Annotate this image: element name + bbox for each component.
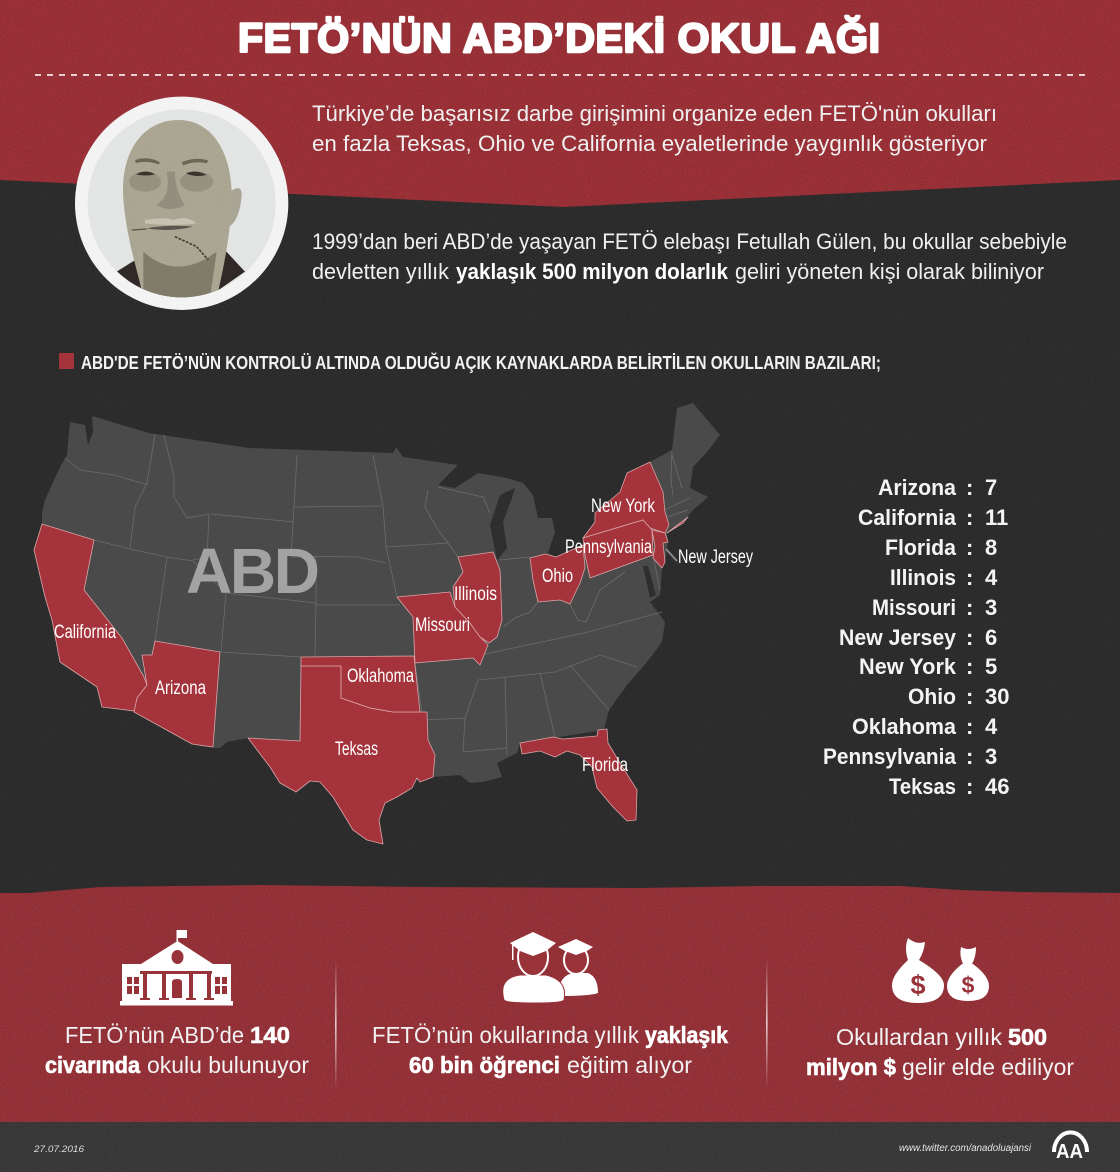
lake michigan <box>490 488 515 560</box>
pennsylvania <box>583 520 653 578</box>
state labels: New York <box>591 496 655 517</box>
stat: revenue: milyon $ <box>806 1054 896 1080</box>
state labels: Ohio <box>542 566 573 587</box>
school counts list: 3 <box>985 744 997 769</box>
stat: students: 60 bin öğrenci <box>409 1052 560 1078</box>
school counts list: 6 <box>985 625 997 650</box>
state borders <box>65 435 690 755</box>
title divider <box>35 74 1085 76</box>
school counts list: Illinois <box>890 565 956 590</box>
new york <box>583 462 669 538</box>
state labels: Oklahoma <box>347 666 414 687</box>
school counts list: : <box>966 744 973 769</box>
state labels: Pennsylvania <box>565 537 652 558</box>
missouri <box>397 592 488 665</box>
florida <box>520 729 637 821</box>
section heading: ABD'DE FETÖ’NÜN KONTROLÜ ALTINDA OLDUĞU AÇIK KAYNAKLARDA BELİRTİLEN OKULLARIN BAZILARI; <box>81 352 881 373</box>
school counts list: : <box>966 654 973 679</box>
school counts list: : <box>966 475 973 500</box>
portrait photo <box>75 97 288 310</box>
school counts list: Pennsylvania <box>823 744 957 769</box>
title: FETÖ’NÜN ABD’DEKİ OKUL AĞI <box>238 15 880 61</box>
state labels: California <box>54 622 116 643</box>
stat: revenue <box>806 1024 1074 1080</box>
anadolu agency logo: AA <box>1056 1141 1083 1163</box>
school counts list: 7 <box>985 475 997 500</box>
stat: schools: okulu bulunuyor <box>147 1052 309 1078</box>
stat: revenue: gelir elde ediliyor <box>902 1054 1074 1080</box>
arizona <box>134 641 220 747</box>
school counts list: 4 <box>985 714 998 739</box>
state labels: Teksas <box>335 739 378 760</box>
icon: money bags <box>892 938 989 1003</box>
state labels: Missouri <box>415 615 470 636</box>
illinois <box>453 552 502 643</box>
state labels: Arizona <box>155 678 206 699</box>
leader description text: devletten yıllık <box>312 259 450 284</box>
school counts list: Ohio <box>908 684 956 709</box>
leader description text: 1999’dan beri ABD’de yaşayan FETÖ elebaşı Fetullah Gülen, bu okullar sebebiyle <box>312 229 1067 254</box>
new jersey leader line <box>666 549 677 561</box>
land mass <box>34 403 720 783</box>
new jersey <box>652 530 668 568</box>
icon: money bags: $ <box>962 972 975 998</box>
stat: schools: 140 <box>250 1022 290 1048</box>
school counts list: Florida <box>885 535 957 560</box>
stat: students <box>372 1022 728 1078</box>
chesapeake bay <box>643 566 656 598</box>
intro text <box>312 101 997 156</box>
school counts list: 30 <box>985 684 1009 709</box>
intro text: Türkiye’de başarısız darbe girişimini organize eden FETÖ'nün okulları <box>312 101 997 126</box>
school counts list: New Jersey <box>839 625 957 650</box>
leader description text: geliri yöneten kişi olarak biliniyor <box>735 259 1044 284</box>
school counts list: : <box>966 714 973 739</box>
stat: students: yaklaşık <box>645 1022 728 1048</box>
leader description text <box>312 229 1067 284</box>
teksas <box>248 666 435 844</box>
stat: schools <box>45 1022 309 1078</box>
school counts list: 4 <box>985 565 998 590</box>
school counts list: Teksas <box>889 774 956 799</box>
ohio <box>530 545 585 604</box>
stat: schools: civarında <box>45 1052 140 1078</box>
stat: revenue: 500 <box>1008 1024 1047 1050</box>
school counts list: 5 <box>985 654 997 679</box>
school counts list: New York <box>859 654 957 679</box>
long island <box>667 517 688 533</box>
school counts list: 3 <box>985 595 997 620</box>
school counts list: 11 <box>985 505 1008 530</box>
abd label: ABD <box>186 535 320 607</box>
school counts list: Arizona <box>878 475 957 500</box>
stat: students: eğitim alıyor <box>567 1052 692 1078</box>
icon: school building <box>120 930 233 1006</box>
school counts list <box>823 475 1009 799</box>
school counts list: : <box>966 684 973 709</box>
stat: students: FETÖ’nün okullarında yıllık <box>372 1022 639 1048</box>
state labels <box>54 496 753 776</box>
school counts list: Oklahoma <box>852 714 957 739</box>
state labels: Illinois <box>454 584 497 605</box>
footer date: 27.07.2016 <box>33 1144 85 1155</box>
school counts list: 46 <box>985 774 1009 799</box>
school counts list: California <box>858 505 957 530</box>
school counts list: : <box>966 774 973 799</box>
school counts list: : <box>966 595 973 620</box>
school counts list: : <box>966 535 973 560</box>
stat: revenue: Okullardan yıllık <box>836 1024 1002 1050</box>
dividers <box>335 958 768 1090</box>
leader description text: yaklaşık 500 milyon dolarlık <box>456 259 729 284</box>
stat: schools: FETÖ’nün ABD’de <box>65 1022 244 1048</box>
anadolu agency logo <box>1054 1132 1087 1163</box>
state labels: New Jersey <box>678 547 753 568</box>
icon: graduates <box>503 932 598 1003</box>
school counts list: : <box>966 625 973 650</box>
school counts list: : <box>966 565 973 590</box>
oklahoma <box>301 656 420 712</box>
california <box>34 524 147 711</box>
intro text: en fazla Teksas, Ohio ve California eyaletlerinde yaygınlık gösteriyor <box>312 131 987 156</box>
school counts list: : <box>966 505 973 530</box>
state labels: Florida <box>582 755 628 776</box>
school counts list: Missouri <box>872 595 956 620</box>
icon: money bags: $ <box>910 970 926 1000</box>
map of USA <box>34 403 753 844</box>
footer twitter link: www.twitter.com/anadoluajansi <box>899 1143 1032 1154</box>
school counts list: 8 <box>985 535 997 560</box>
